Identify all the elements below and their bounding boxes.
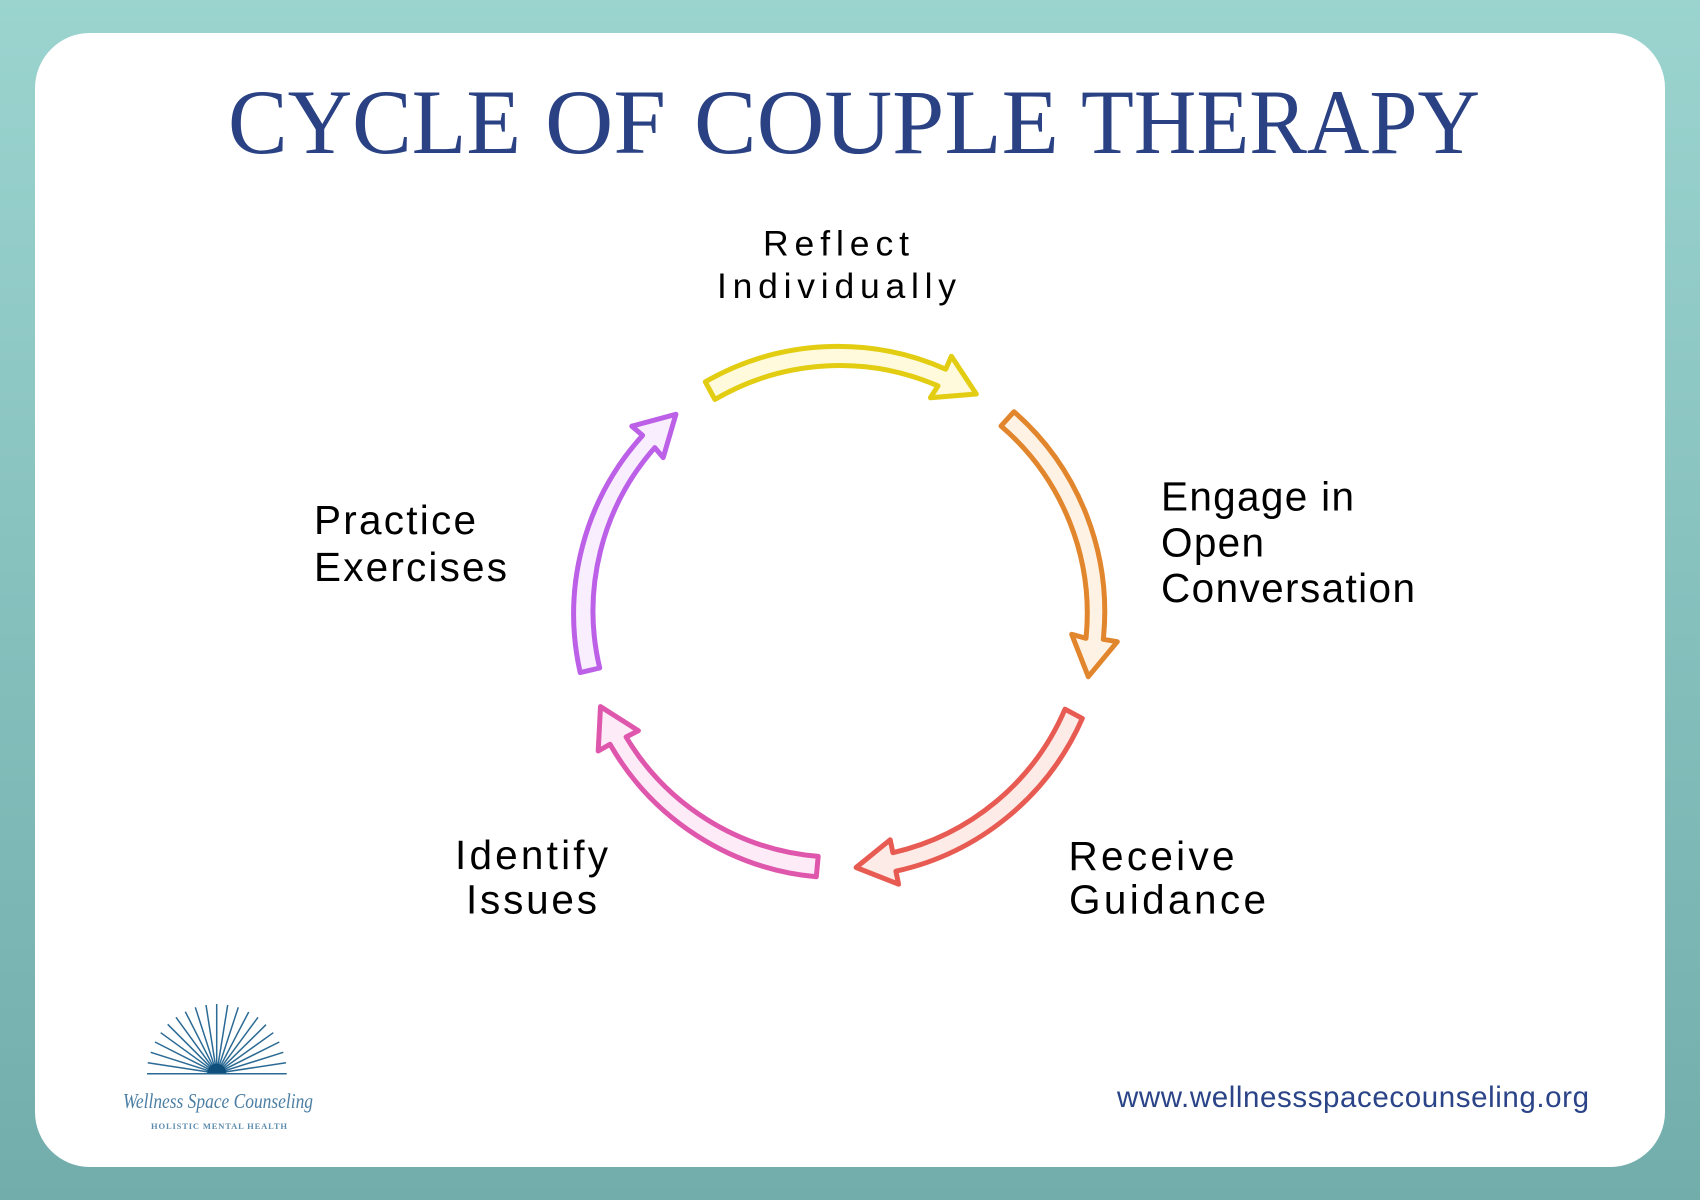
icon: sunburst — [147, 1004, 287, 1074]
title — [228, 71, 1480, 173]
title: THERAPY — [1081, 71, 1480, 173]
logo: Wellness Space Counseling — [123, 1004, 313, 1131]
arrow: practice to reflect (purple) — [574, 414, 676, 673]
arrow: reflect to engage (yellow) — [705, 346, 976, 400]
arrow: identify to practice (pink) — [598, 707, 818, 877]
label: Identify Issues: Identify — [455, 832, 609, 878]
arrow: engage to receive (orange) — [1001, 412, 1117, 677]
arrow: receive to identify (red) — [856, 709, 1082, 884]
label: Identify Issues — [455, 832, 609, 922]
label: Receive Guidance: Guidance — [1069, 876, 1266, 922]
label: Reflect Individually — [717, 224, 956, 306]
website url: www.wellnessspacecounseling.org — [1116, 1081, 1589, 1114]
label: Engage in Open Conversation — [1161, 474, 1415, 611]
label: Practice Exercises — [314, 497, 507, 590]
label: Engage in Open Conversation: Conversation — [1161, 565, 1415, 611]
title: COUPLE — [694, 71, 1059, 173]
cycle diagram — [574, 346, 1117, 884]
label: Identify Issues: Issues — [466, 876, 597, 922]
label: Practice Exercises: Exercises — [314, 544, 507, 590]
title: CYCLE — [228, 71, 521, 173]
label: Receive Guidance: Receive — [1068, 833, 1234, 879]
label: Engage in Open Conversation: Engage in — [1161, 474, 1354, 520]
label: Engage in Open Conversation: Open — [1161, 520, 1264, 566]
label: Receive Guidance — [1068, 833, 1266, 922]
title: OF — [545, 71, 666, 173]
label: Reflect Individually: Reflect — [763, 224, 909, 264]
logo tagline: HOLISTIC MENTAL HEALTH — [151, 1121, 287, 1131]
label: Practice Exercises: Practice — [314, 497, 476, 543]
logo script name: Wellness Space Counseling — [123, 1089, 313, 1113]
label: Reflect Individually: Individually — [717, 266, 956, 306]
